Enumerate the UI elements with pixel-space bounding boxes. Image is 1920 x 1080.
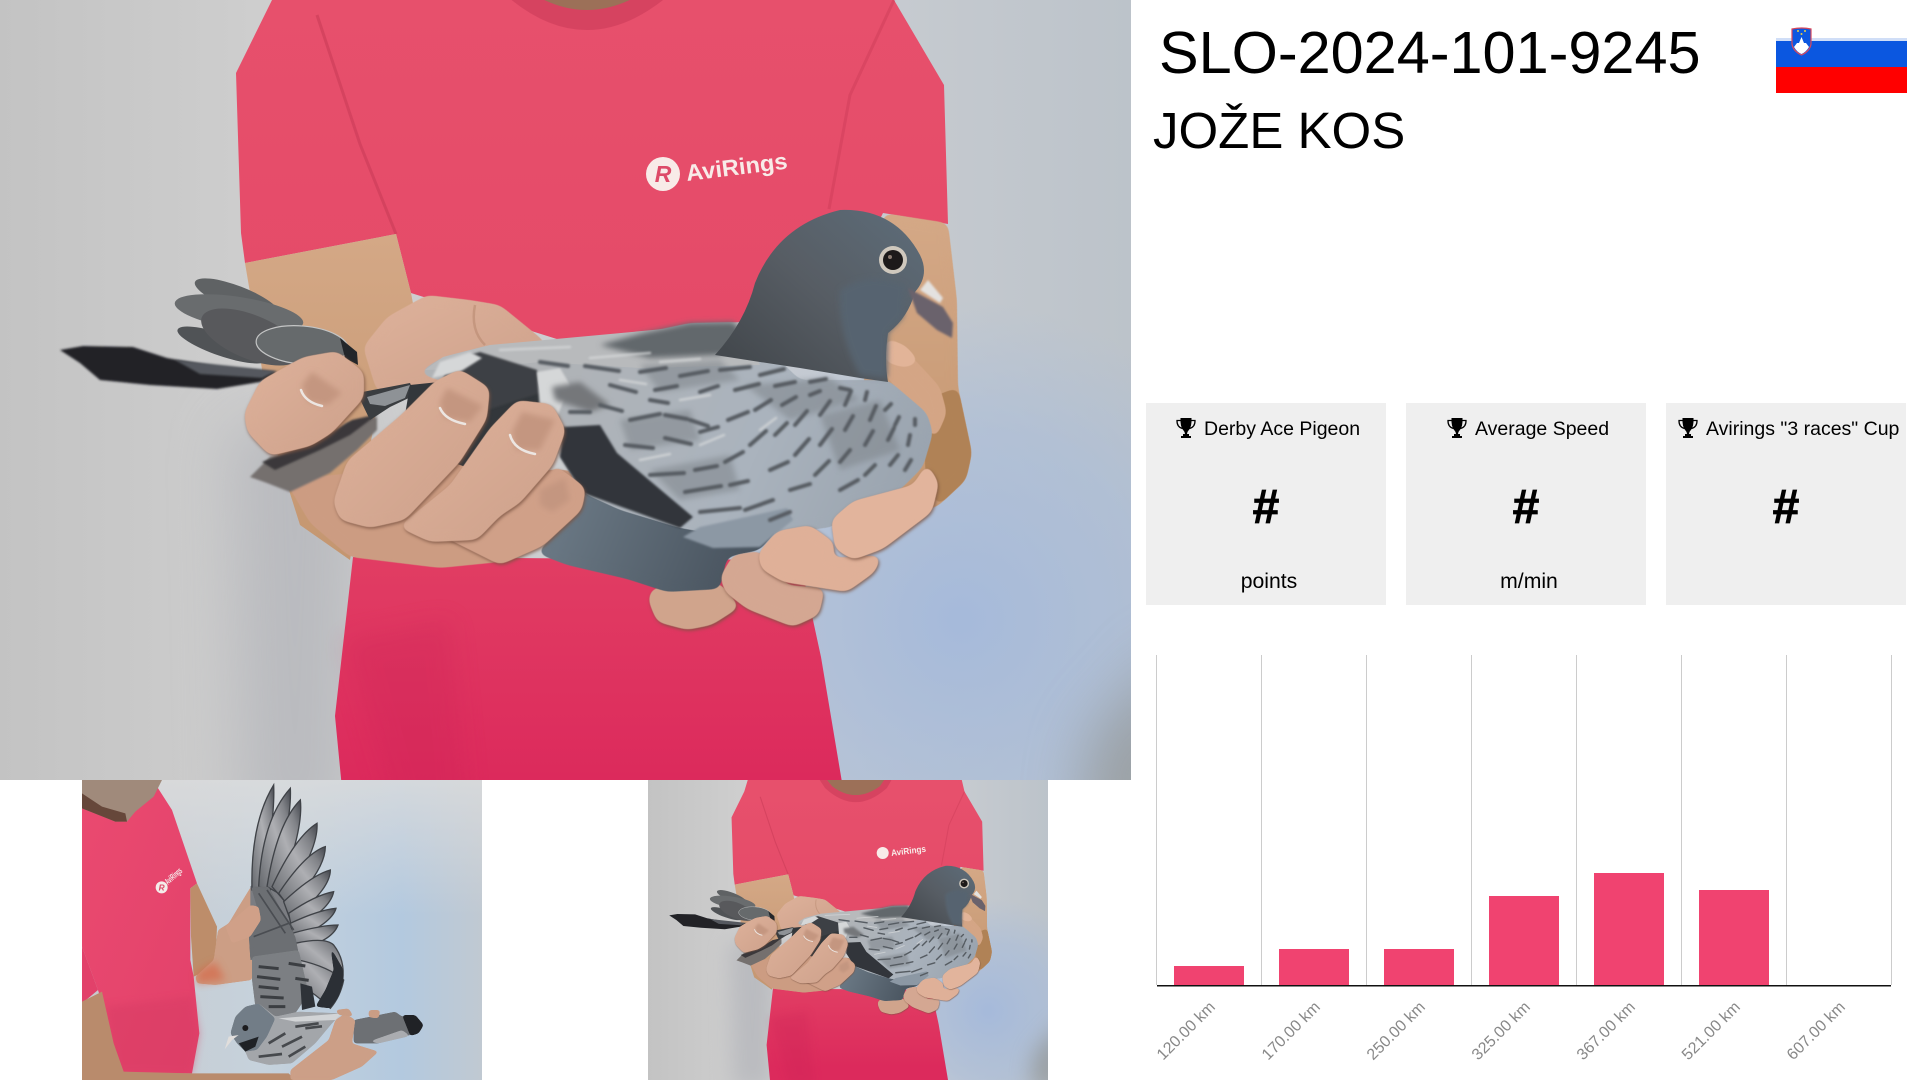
axis labels: 607.00 km (1784, 999, 1849, 1064)
tail (354, 1012, 424, 1043)
panel: Derby Ace Pigeon card: Derby Ace Pigeon (1204, 418, 1360, 440)
panel: Average Speed card (1406, 403, 1646, 605)
panel: Derby Ace Pigeon card (1146, 403, 1386, 605)
panel: Average Speed card: # (1513, 481, 1539, 534)
neck and chin (82, 780, 162, 822)
right-hand fingers (720, 463, 939, 627)
wing underlay (250, 886, 290, 960)
right forearm (860, 213, 972, 520)
axis labels: 170.00 km (1259, 999, 1324, 1064)
icon: Slovenian flag (1776, 28, 1907, 93)
shirt logo: AviRings (646, 156, 787, 191)
holding hand (290, 1013, 379, 1080)
thumbnail logo: AviRings: R (159, 882, 165, 892)
axis labels: 250.00 km (1364, 999, 1429, 1064)
body mottling (620, 360, 900, 500)
axis labels (1154, 999, 1849, 1064)
icon: trophy (1679, 418, 1697, 438)
axis labels: 367.00 km (1574, 999, 1639, 1064)
thumbnail logo: AviRings: AviRings (163, 866, 184, 886)
panel: thumbnail photo of pigeon held in hands (648, 770, 1066, 1080)
panel: Avirings 3 races Cup card: Avirings "3 races" Cup (1706, 418, 1900, 440)
panel: Derby Ace Pigeon card: points (1241, 570, 1297, 593)
axis labels: 325.00 km (1469, 999, 1534, 1064)
pigeon body (400, 210, 953, 592)
bird body (230, 1003, 342, 1065)
tail feathers (60, 271, 358, 389)
panel: Average Speed card: m/min (1500, 570, 1558, 593)
lower left palm (285, 430, 575, 568)
panel: Derby Ace Pigeon card: # (1253, 481, 1279, 534)
panel: Avirings 3 races Cup card (1666, 403, 1906, 605)
shirt (82, 787, 199, 1073)
heading: ring number: SLO-2024-101-9245 (1159, 19, 1701, 86)
upper thumb (363, 295, 555, 392)
panel: thumbnail photo with spread wing (82, 780, 482, 1080)
axis labels: 521.00 km (1679, 999, 1744, 1064)
feet (250, 417, 377, 492)
shirt logo: AviRings: AviRings (684, 148, 789, 186)
thumbnail logo: AviRings: AviRings (891, 844, 926, 858)
icon: trophy (1177, 418, 1195, 438)
beak (908, 288, 953, 338)
panel: Average Speed card: Average Speed (1475, 418, 1609, 440)
eye (879, 246, 907, 274)
shirt (236, 0, 948, 830)
neck and head (715, 210, 924, 382)
left forearm (245, 234, 420, 560)
right hand lower fingers behind bird (648, 583, 740, 630)
shirt logo: AviRings: R (655, 161, 672, 187)
bars (1174, 873, 1769, 985)
bar chart: results by race distance (1154, 655, 1892, 1064)
arms and hand (82, 992, 295, 1080)
axis labels: 120.00 km (1154, 999, 1219, 1064)
spread wing feathers (252, 785, 344, 1008)
feather flecks (540, 362, 915, 520)
thumb in front of wing (248, 906, 261, 937)
front left-hand fingers (244, 351, 586, 565)
icon: trophy (1448, 418, 1466, 438)
thumbnail logo: AviRings (876, 847, 926, 859)
thumbnail logo: AviRings (156, 866, 184, 893)
panel: Avirings 3 races Cup card: # (1773, 481, 1799, 534)
heading: owner name: JOŽE KOS (1153, 102, 1405, 159)
panel: main photo of pigeon held in hands (0, 0, 1131, 780)
collar and neck (480, 0, 692, 30)
